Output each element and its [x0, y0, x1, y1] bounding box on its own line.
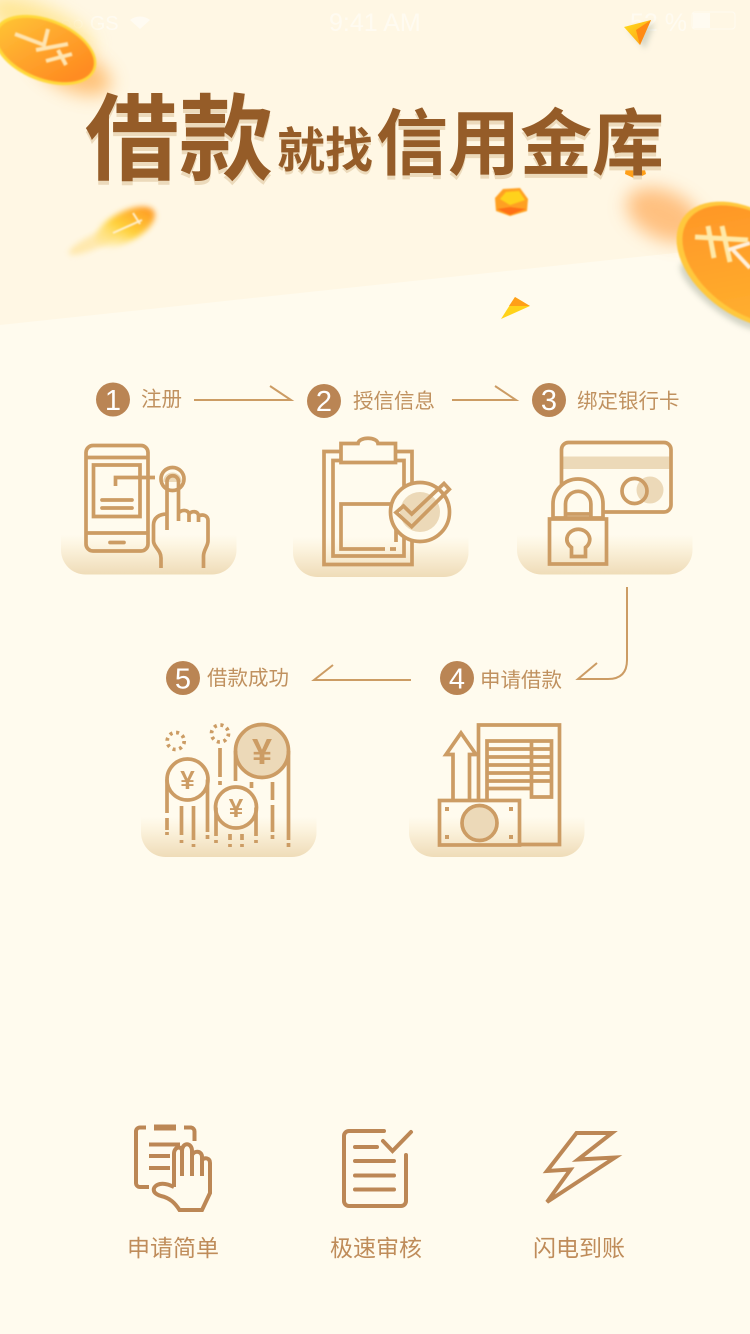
step 3 heading: 绑定银行卡 [577, 384, 680, 414]
icon: phone tap [61, 446, 236, 574]
step 2 heading: 授信信息 [353, 384, 435, 414]
step 2 heading: 2 [316, 386, 332, 418]
step 3 heading: 3 [541, 385, 557, 417]
step 1 heading: 注册 [141, 382, 182, 412]
status bar: 52 % [630, 9, 687, 37]
arrow 2 to 3 [452, 386, 516, 400]
step 3 heading [532, 383, 680, 417]
coin: top left [0, 0, 119, 106]
feature: simple application [127, 1128, 219, 1263]
step 4 heading: 申请借款 [480, 663, 562, 693]
coin: small left [66, 198, 161, 260]
icon: coins [141, 724, 316, 857]
step 1 heading [96, 382, 182, 417]
header background band [0, 0, 750, 325]
step 4 heading [440, 661, 562, 696]
label: 极速审核 [330, 1229, 422, 1263]
status bar [60, 9, 735, 37]
step 5 heading: 借款成功 [207, 661, 289, 691]
title: 信用金库 [376, 85, 664, 190]
gem [495, 188, 528, 216]
status bar: 9:41 AM [329, 9, 421, 37]
feature: instant payout [533, 1133, 625, 1263]
icon: checklist document [344, 1131, 411, 1206]
title [85, 64, 664, 204]
icon: card and lock [517, 442, 692, 574]
title: 信用金库 [376, 89, 664, 194]
title: 就找 [277, 114, 373, 184]
step 5 heading: 5 [175, 664, 191, 696]
step 1 heading: 1 [105, 385, 121, 417]
feature: fast review [330, 1131, 422, 1263]
step 5 heading [166, 661, 289, 696]
small gem behind title [625, 166, 646, 179]
step 2 heading [307, 384, 435, 418]
icon: form and hand [136, 1128, 210, 1210]
triangle: top right [624, 20, 655, 49]
arrow 4 to 5 [314, 665, 411, 680]
label: 申请简单 [127, 1229, 219, 1263]
title: 借款 [85, 64, 273, 200]
icon: lightning bolt [547, 1133, 615, 1202]
title: 借款 [85, 68, 273, 204]
icon: clipboard check [293, 438, 468, 577]
label: 闪电到账 [533, 1229, 625, 1263]
step 4 heading: 4 [449, 664, 465, 696]
icon: coins: ¥ [180, 765, 195, 795]
icon: coins: ¥ [229, 793, 244, 823]
triangle: bottom [501, 297, 530, 319]
arrow 3 to 4 [578, 587, 627, 679]
icon: coins: ¥ [252, 731, 272, 772]
arrow 1 to 2 [194, 386, 291, 400]
coin: right [618, 175, 750, 355]
title: 就找 [277, 111, 373, 181]
status bar: ○○ GS [60, 13, 119, 35]
icon: money and document [409, 725, 584, 857]
